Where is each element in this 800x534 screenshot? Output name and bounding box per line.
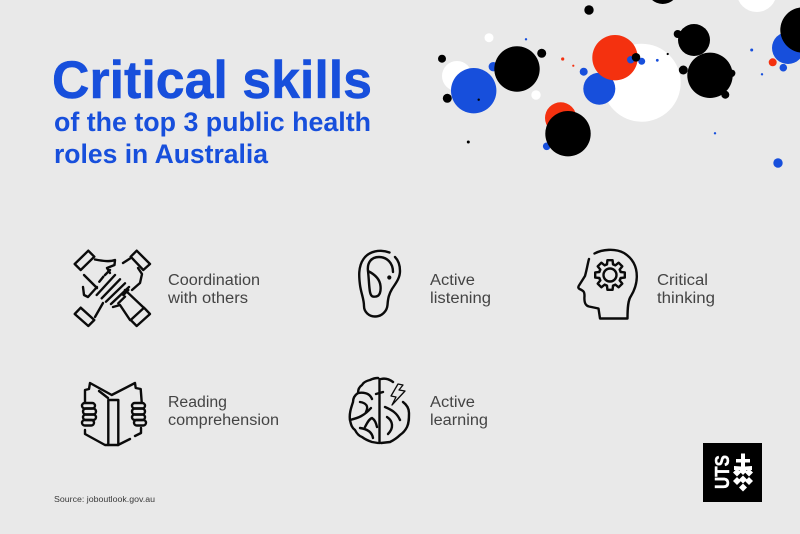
label: reading comprehension	[168, 394, 279, 429]
icon: brain with lightning bolt	[350, 378, 409, 443]
icon: joined hands	[75, 251, 150, 326]
label: active listening: Active	[430, 272, 475, 289]
label: critical thinking	[657, 272, 715, 307]
skill: critical thinking	[578, 250, 715, 318]
label: reading comprehension: Reading	[168, 394, 227, 411]
label: active learning	[430, 394, 488, 429]
skill: coordination with others	[75, 251, 260, 326]
label: reading comprehension: comprehension	[168, 412, 279, 429]
label: active learning: learning	[430, 412, 488, 429]
logo: UTS	[703, 443, 762, 502]
icon: ear	[359, 251, 400, 316]
logo: UTS: UTS	[712, 455, 734, 489]
label: active listening	[430, 272, 491, 307]
skill: active learning	[350, 378, 488, 443]
label: critical thinking: thinking	[657, 290, 715, 307]
icon: head with gear	[578, 250, 637, 318]
label: coordination with others: Coordination	[168, 272, 260, 289]
title	[52, 51, 372, 169]
label: coordination with others	[167, 272, 260, 307]
label: active learning: Active	[430, 394, 475, 411]
title: roles in Australia	[54, 139, 269, 169]
label: critical thinking: Critical	[657, 272, 708, 289]
label: coordination with others: with others	[167, 290, 248, 307]
source note: Source: joboutlook.gov.au	[54, 495, 155, 504]
title: Critical skills	[52, 51, 372, 110]
skill: reading comprehension	[82, 383, 279, 445]
skill: active listening	[359, 251, 491, 316]
icon: open book held in hands	[82, 383, 146, 445]
label: active listening: listening	[430, 290, 491, 307]
decorative circle cluster	[438, 0, 800, 168]
title: of the top 3 public health	[54, 107, 371, 137]
